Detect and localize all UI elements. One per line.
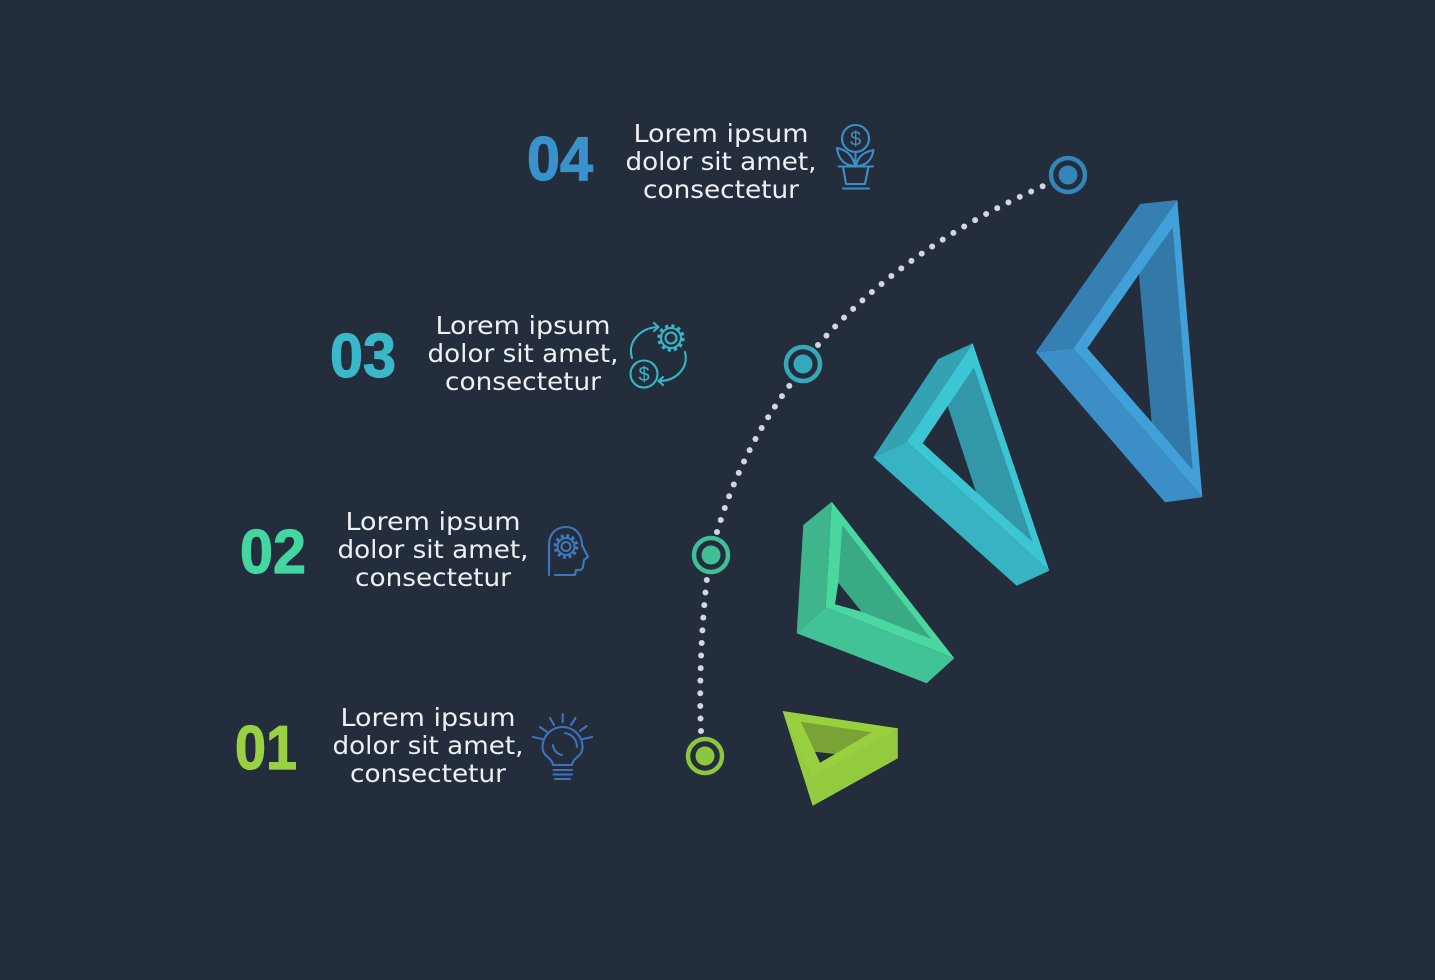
node 04 — [1051, 158, 1085, 192]
icon: money plant: $ — [850, 128, 861, 150]
triangle 2: green — [797, 502, 954, 683]
node 01 — [688, 739, 722, 773]
text block 02: Lorem ipsum — [346, 507, 520, 536]
text block 02 — [338, 507, 528, 592]
number 02: 02 — [240, 518, 306, 587]
icon: money and gear cycle: $ — [638, 364, 650, 386]
text block 04 — [626, 119, 816, 204]
text block 04: consectetur — [643, 175, 800, 204]
node 02 — [694, 538, 728, 572]
triangle 3: teal — [873, 343, 1049, 586]
node 03 — [786, 347, 820, 381]
number 03: 03 — [330, 322, 396, 391]
text block 01: Lorem ipsum — [340, 703, 516, 732]
number 04: 04 — [527, 125, 593, 194]
icon: head with gear — [549, 527, 588, 575]
text block 01 — [332, 703, 524, 788]
text block 03 — [428, 311, 618, 396]
icon: money plant — [837, 125, 874, 188]
text block 04: Lorem ipsum — [634, 119, 808, 148]
text block 02: consectetur — [355, 563, 512, 592]
text block 03: dolor sit amet, — [428, 339, 618, 368]
icon: light bulb — [533, 714, 592, 779]
triangle 4: blue — [1036, 200, 1202, 502]
text block 01: dolor sit amet, — [332, 731, 524, 760]
text block 02: dolor sit amet, — [338, 535, 528, 564]
triangle 1: lime — [783, 711, 898, 806]
icon: money and gear cycle — [630, 323, 686, 388]
dotted curved timeline — [700, 183, 1050, 731]
text block 03: Lorem ipsum — [436, 311, 610, 340]
text block 03: consectetur — [445, 367, 602, 396]
number 01: 01 — [235, 714, 297, 783]
text block 04: dolor sit amet, — [626, 147, 816, 176]
text block 01: consectetur — [350, 759, 507, 788]
